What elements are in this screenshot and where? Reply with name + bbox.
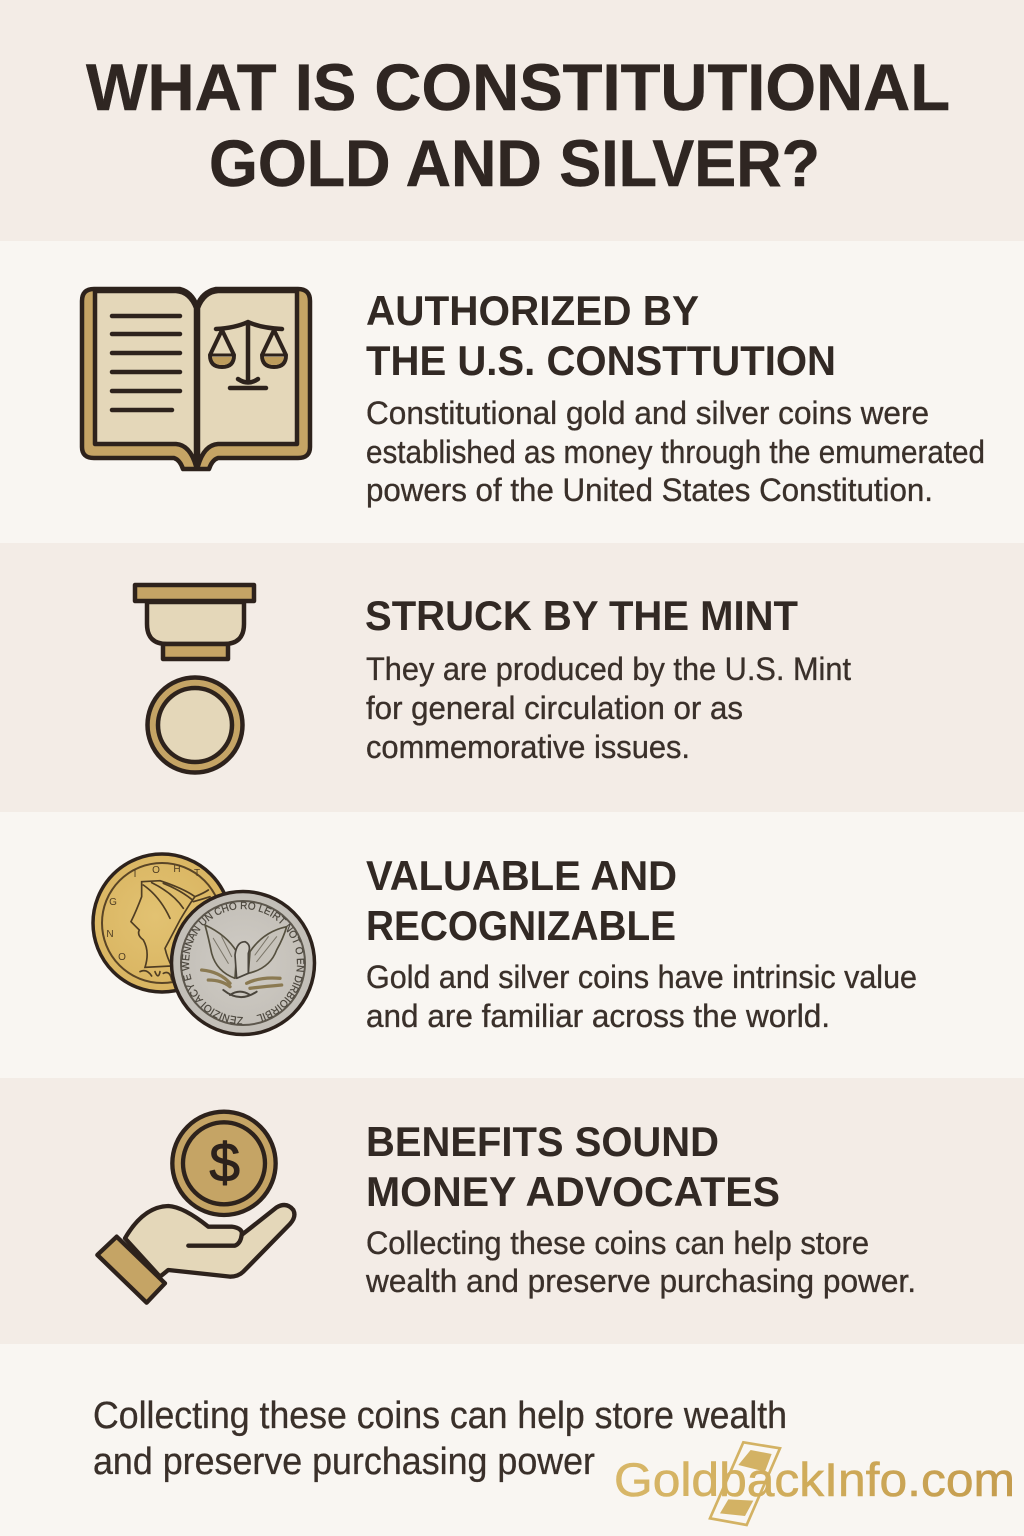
logo: GoldbackInfo.com: [614, 1442, 1015, 1525]
text: mint description: commemorative issues.: [366, 729, 690, 765]
text: authorized description: [366, 395, 985, 508]
text: benefits description: [365, 1225, 916, 1299]
panel: authorized by the constitution: [0, 241, 1024, 543]
panel: struck by the mint: [0, 543, 1024, 812]
icon: open book with scales: [82, 289, 310, 469]
gold coin: G: [109, 897, 117, 908]
text: authorized description: established as money through the emumerated: [366, 434, 985, 470]
text: valuable description: [366, 959, 917, 1034]
text: closing statement: and preserve purchasing power: [93, 1441, 595, 1483]
heading: struck by the mint: STRUCK BY THE MINT: [365, 592, 798, 639]
heading: benefits sound money advocates: MONEY ADVOCATES: [366, 1168, 780, 1215]
text: authorized description: Constitutional gold and silver coins were: [366, 395, 929, 431]
logo: GoldbackInfo.com: GoldbackInfo.com: [614, 1453, 1015, 1506]
title: GOLD AND SILVER?: [209, 126, 820, 200]
gold coin: T: [194, 868, 200, 879]
text: mint description: [366, 651, 851, 765]
gold coin: [93, 854, 231, 992]
title: WHAT IS CONSTITUTIONAL: [86, 50, 950, 124]
panel: valuable and recognizable: [91, 852, 917, 1036]
panel: footer: [0, 1344, 1024, 1536]
title: [86, 50, 950, 200]
heading: valuable and recognizable: VALUABLE AND: [366, 852, 677, 899]
gold coin: I: [134, 869, 136, 880]
heading: authorized by the U.S. constitution: [366, 287, 836, 384]
title panel: [0, 0, 1024, 241]
heading: authorized by the U.S. constitution: AUTHORIZED BY: [366, 287, 699, 334]
text: closing statement: [93, 1395, 787, 1483]
text: authorized description: powers of the United States Constitution.: [366, 472, 933, 508]
gold coin: H: [173, 864, 181, 875]
heading: valuable and recognizable: [366, 852, 677, 949]
logo mark: [710, 1442, 780, 1525]
heading: authorized by the U.S. constitution: THE U.S. CONSTTUTION: [366, 337, 836, 384]
heading: benefits sound money advocates: [366, 1118, 780, 1215]
text: mint description: for general circulation or as: [366, 690, 743, 726]
text: valuable description: Gold and silver coins have intrinsic value: [366, 959, 917, 995]
panel: benefits sound money advocates: [0, 1078, 1024, 1344]
silver coin: ZENIZIOI ACY E WENNAN UN CHO RO LEIRT NOT O EN DIRBIOIRBIL: [182, 902, 304, 1024]
gold coin: N: [106, 929, 114, 940]
icon: hand holding dollar coin: [97, 1112, 294, 1303]
text: closing statement: Collecting these coins can help store wealth: [93, 1395, 787, 1437]
gold coin: O: [152, 865, 160, 876]
heading: benefits sound money advocates: BENEFITS SOUND: [366, 1118, 719, 1165]
text: mint description: They are produced by the U.S. Mint: [366, 651, 851, 687]
gold coin: O: [118, 952, 126, 963]
icon: gold and silver coins: [91, 852, 316, 1036]
text: valuable description: and are familiar across the world.: [366, 998, 830, 1034]
text: benefits description: wealth and preserve purchasing power.: [365, 1263, 916, 1299]
icon: coin press and blank coin: [135, 585, 254, 772]
text: benefits description: Collecting these coins can help store: [366, 1225, 869, 1261]
heading: valuable and recognizable: RECOGNIZABLE: [366, 902, 676, 949]
dollar sign: $: [209, 1132, 240, 1194]
